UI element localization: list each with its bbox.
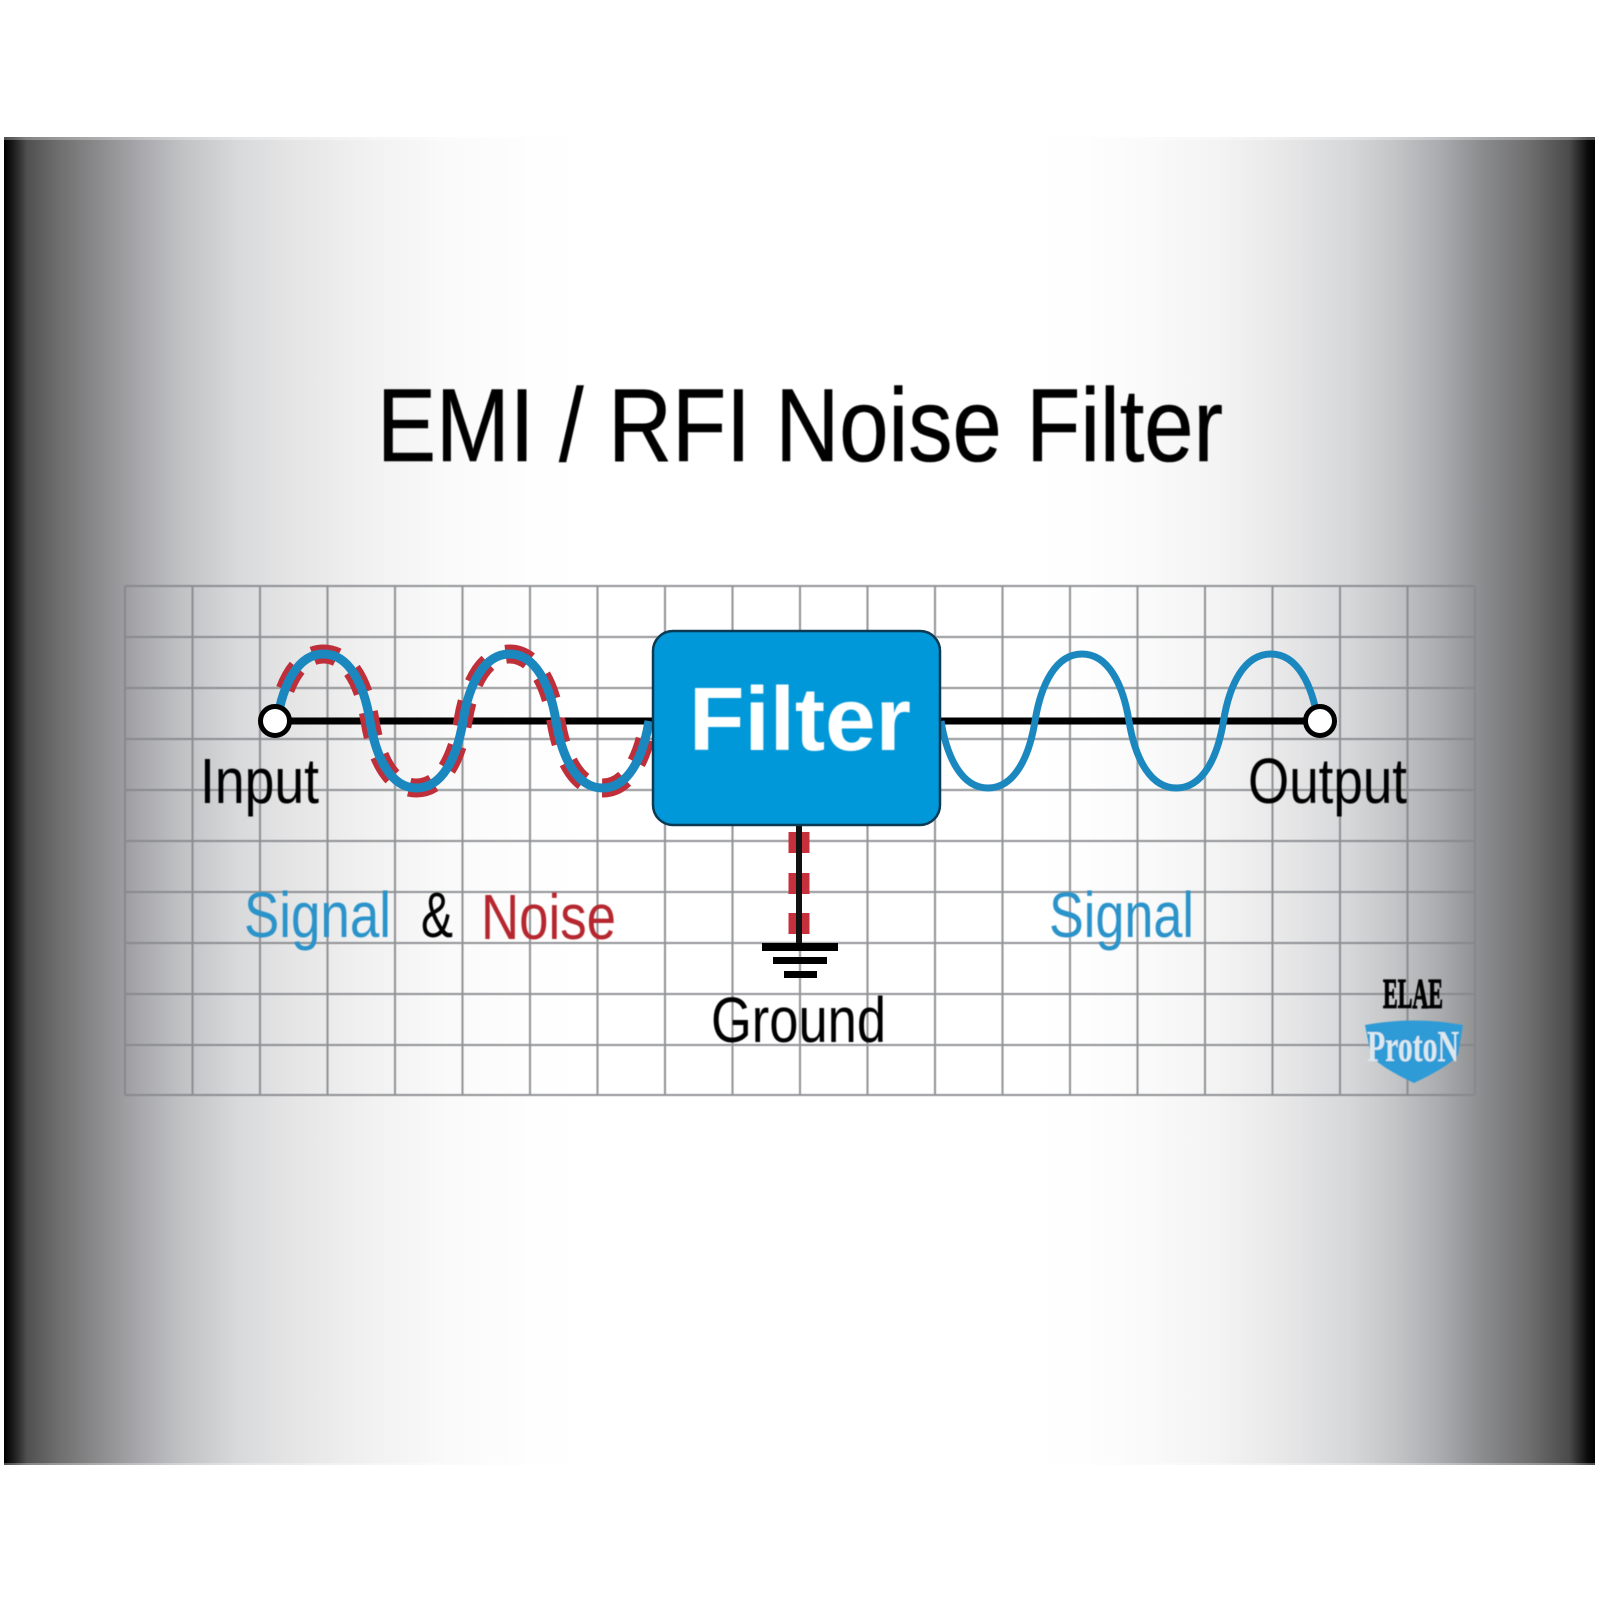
label: signal and noise: Noise: [481, 881, 616, 953]
label: signal and noise: Signal: [244, 879, 391, 951]
ground connection with noise: [788, 825, 810, 947]
filter block: [653, 631, 940, 825]
label: output: Output: [1248, 745, 1407, 817]
output signal waveform (blue): [941, 654, 1318, 788]
input terminal: [260, 706, 290, 736]
label: ground: Ground: [711, 984, 886, 1056]
output terminal: [1306, 706, 1334, 736]
noise waveform (red dashed): [277, 654, 649, 788]
label: signal and noise: &: [421, 879, 453, 951]
circuit line: input to output: [275, 718, 1320, 724]
filter block: Filter: [689, 670, 911, 770]
logo: ELAE Proton: ELAE: [1383, 972, 1443, 1018]
input signal waveform (blue): [277, 654, 649, 788]
ground symbol: [762, 943, 838, 978]
title: EMI / RFI Noise Filter: [377, 368, 1223, 484]
label: signal and noise: [244, 879, 616, 953]
label: signal out: Signal: [1049, 879, 1194, 951]
logo: ELAE Proton: [1365, 972, 1463, 1083]
diagram grid: [125, 586, 1475, 1095]
logo: ELAE Proton: ProtoN: [1367, 1022, 1459, 1071]
label: input: Input: [200, 745, 319, 817]
